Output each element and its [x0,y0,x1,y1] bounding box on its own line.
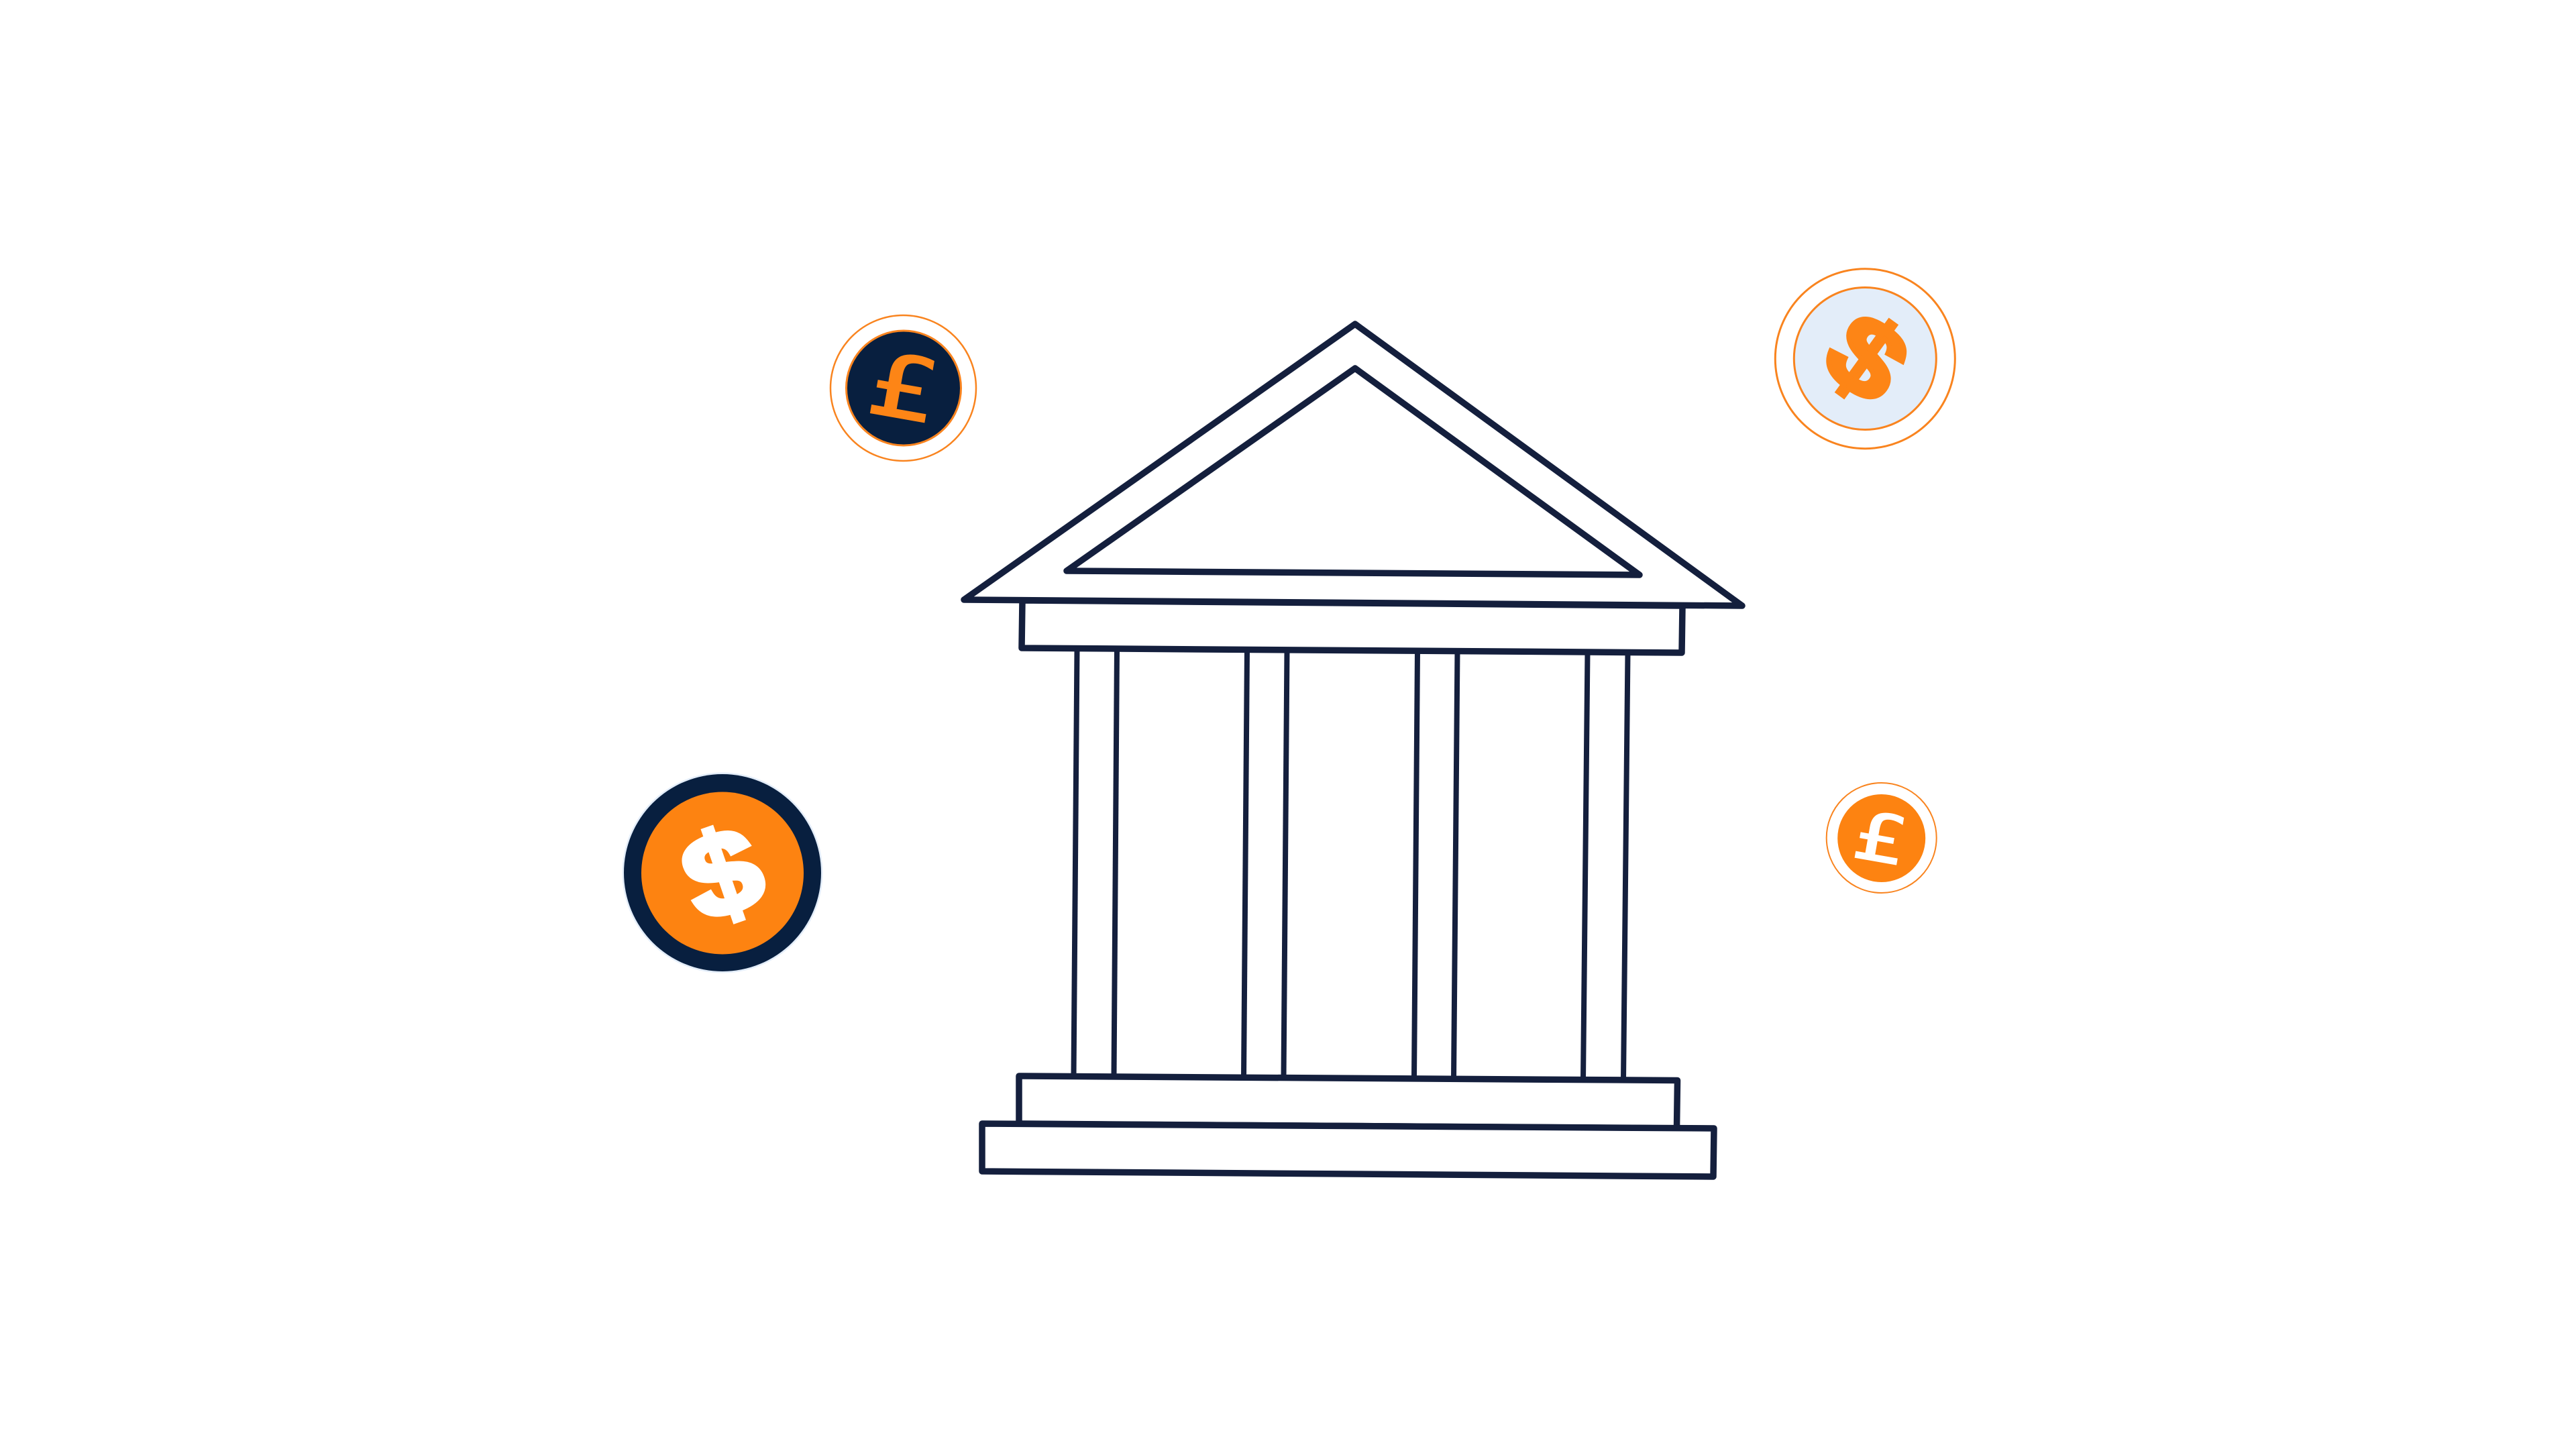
coin: navy pound, top left [830,315,976,461]
bank building [964,324,1742,1177]
inner pediment triangle [1067,368,1640,575]
upper base step [1019,1076,1677,1128]
coin: orange pound, right [1827,783,1937,893]
columns [1073,649,1627,1080]
coin: pale blue dollar, top right [1775,269,1955,449]
outer pediment triangle [964,324,1742,606]
pound symbol: £ [861,333,947,443]
entablature [1022,600,1682,653]
coin: orange dollar with navy ring, left [623,773,822,973]
dollar symbol: $ [666,800,779,947]
lower base step [982,1124,1714,1177]
pound symbol: £ [1847,796,1914,881]
dollar symbol: $ [1804,288,1931,426]
